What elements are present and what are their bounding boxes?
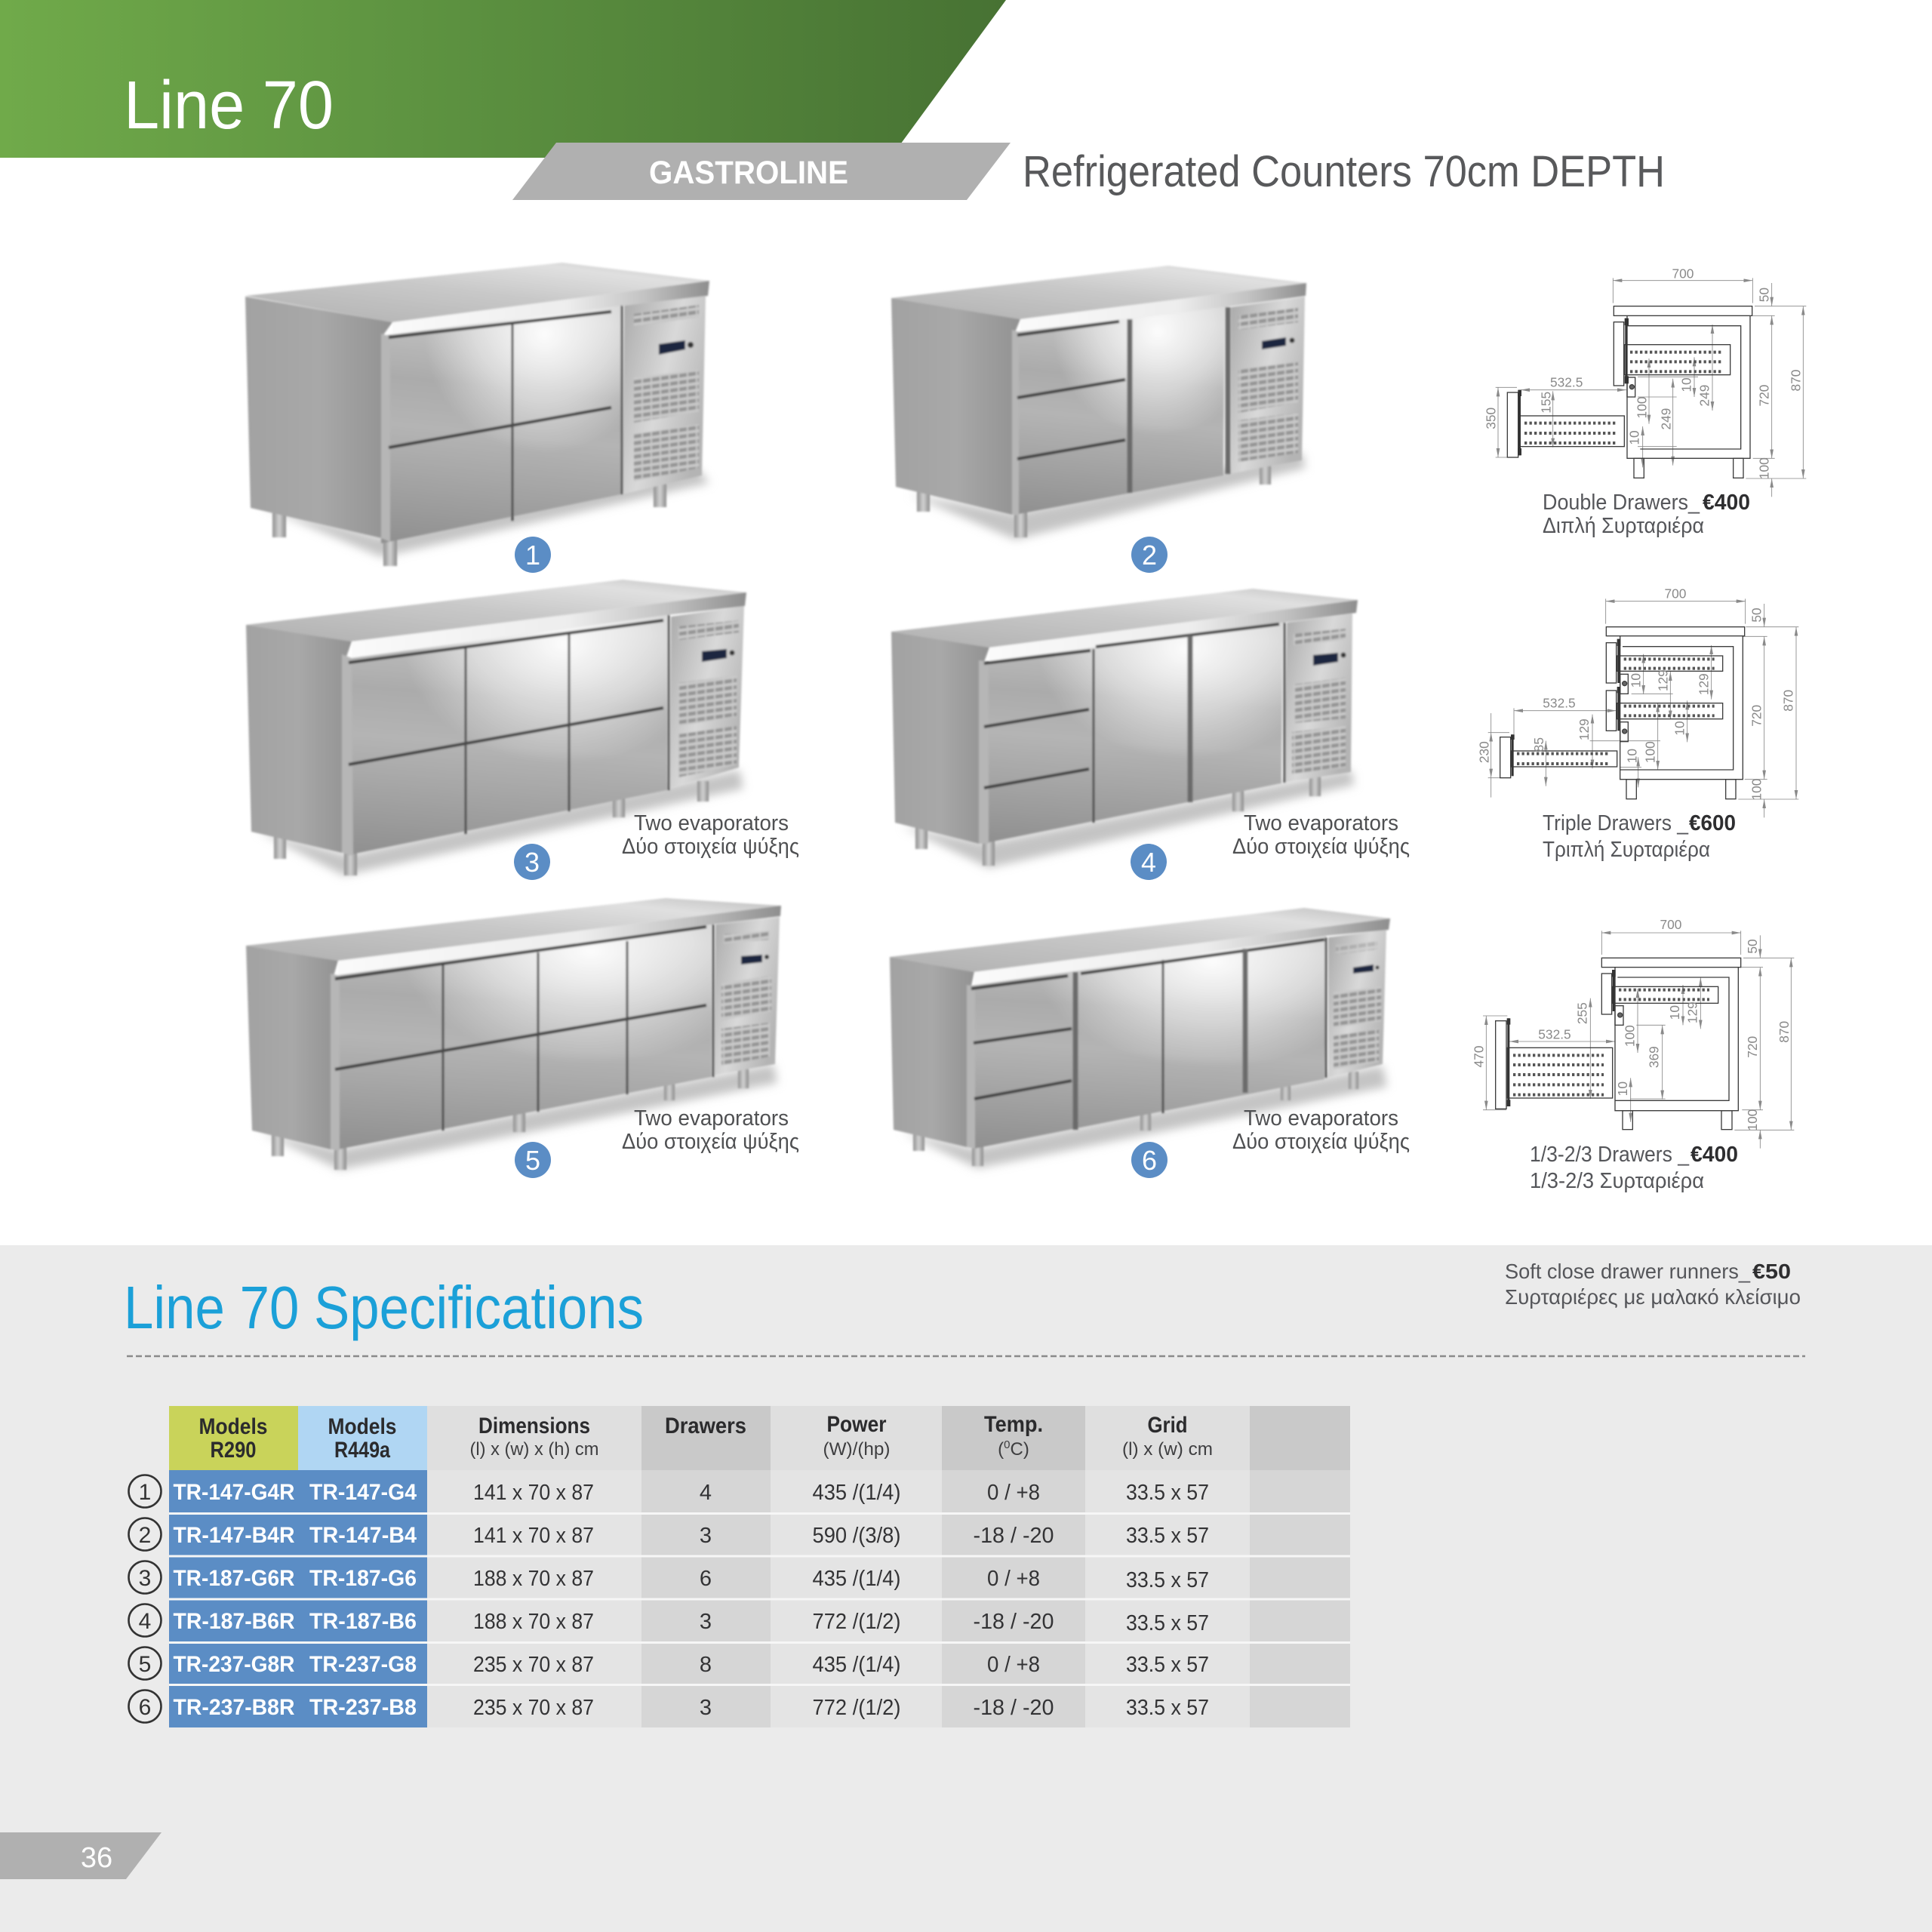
product 3: counter with six drawers [246, 580, 799, 880]
dimension values: 129 [1696, 673, 1711, 695]
row 1 [128, 1475, 1209, 1508]
number badge 2 [1131, 537, 1168, 573]
row 6: 6 [139, 1695, 151, 1720]
note: two evaporators: Two evaporators [634, 1106, 789, 1131]
dimension values: 255 [1575, 1002, 1590, 1024]
product 1: counter with four drawers [245, 263, 709, 573]
dimension values: 50 [1745, 939, 1760, 954]
dimension values: 10 [1679, 377, 1694, 392]
dimension values: 870 [1777, 1021, 1792, 1043]
row 6: TR-237-B8R [174, 1695, 295, 1720]
row 1: TR-147-G4 [309, 1480, 417, 1505]
dimension values: 230 [1476, 741, 1491, 763]
row 4: 4 [139, 1609, 151, 1634]
subtitle: Refrigerated Counters 70cm DEPTH [1023, 147, 1665, 196]
number badge 5 [515, 1142, 551, 1178]
row 5: 8 [700, 1653, 712, 1677]
row 2: 590 /(3/8) [812, 1524, 901, 1548]
row 6: -18 / -20 [974, 1696, 1054, 1720]
table header row [199, 1412, 1213, 1463]
row 6 [128, 1690, 1209, 1722]
note: two evaporators: Δύο στοιχεία ψύξης [622, 1130, 799, 1154]
dimension values: 700 [1672, 266, 1694, 281]
caption: one third and two thirds drawers price: 1/3-2/3 Drawers _ [1530, 1143, 1690, 1167]
row 3: 3 [139, 1566, 151, 1591]
dimension values: 10 [1624, 749, 1639, 763]
green header band [0, 0, 1006, 158]
row 4 [128, 1604, 1209, 1636]
dimension lines [1488, 598, 1798, 817]
row 4: 188 x 70 x 87 [473, 1610, 594, 1634]
row 5: 33.5 x 57 [1126, 1653, 1209, 1677]
number badge 2: 2 [1142, 540, 1157, 571]
table header row: Temp. [984, 1412, 1043, 1437]
row 3: 0 / +8 [987, 1567, 1040, 1591]
caption: double drawers price [1543, 491, 1750, 538]
row 3: 188 x 70 x 87 [473, 1567, 594, 1591]
table header row: Models [199, 1414, 267, 1439]
dimension values: 10 [1628, 673, 1643, 688]
dimension values: 700 [1665, 586, 1686, 601]
note: two evaporators [1232, 1106, 1410, 1154]
table header row: R290 [210, 1438, 257, 1463]
table header row: (l) x (w) cm [1122, 1439, 1213, 1460]
table header row: Dimensions [478, 1414, 590, 1438]
note: soft close runners: €50 [1752, 1260, 1791, 1283]
heading: specifications: Line 70 Specifications [124, 1274, 644, 1341]
row 1: 1 [139, 1480, 151, 1505]
row 1: 0 / +8 [987, 1481, 1040, 1505]
row 3: 6 [700, 1567, 712, 1591]
row 4: 772 /(1/2) [812, 1610, 901, 1634]
dimension values: 700 [1660, 917, 1681, 932]
number badge 1 [515, 537, 551, 573]
note: soft close runners: Soft close drawer runners_ [1505, 1260, 1750, 1283]
table header row: (W)/(hp) [823, 1439, 891, 1460]
row 4: 33.5 x 57 [1126, 1611, 1209, 1635]
dimension values: 129 [1684, 1001, 1700, 1023]
row 1: TR-147-G4R [174, 1480, 295, 1505]
dimension values: 100 [1745, 1109, 1760, 1131]
cabinet section [1507, 306, 1752, 478]
dimension values: 532.5 [1543, 695, 1576, 710]
perforations [1513, 990, 1709, 1095]
dimension values: 10 [1615, 1081, 1630, 1096]
dimension values: 720 [1756, 385, 1771, 406]
table header row: C) [1011, 1439, 1029, 1460]
caption: double drawers price: €400 [1703, 491, 1750, 515]
row 4: -18 / -20 [974, 1610, 1054, 1634]
dimension values: 369 [1646, 1046, 1661, 1068]
row 4: TR-187-B6R [174, 1609, 295, 1634]
product 6: three drawers and three doors [890, 908, 1410, 1178]
dimension values: 155 [1538, 392, 1553, 414]
row 5: 235 x 70 x 87 [473, 1653, 594, 1677]
row 2: -18 / -20 [974, 1524, 1054, 1548]
technical drawing: triple drawers [1476, 586, 1798, 817]
row 1: 33.5 x 57 [1126, 1481, 1209, 1505]
dimension values: 85 [1531, 737, 1546, 752]
dimension values [1484, 266, 1804, 479]
row 2: 33.5 x 57 [1126, 1524, 1209, 1548]
number badge 5: 5 [525, 1145, 540, 1176]
dimension values: 249 [1658, 408, 1673, 429]
row 5: 5 [139, 1652, 151, 1677]
row 2: TR-147-B4R [174, 1523, 295, 1548]
note: two evaporators [622, 811, 799, 859]
product 5: counter with eight drawers [246, 898, 799, 1178]
row 5 [128, 1647, 1209, 1680]
row 4: TR-187-B6 [309, 1609, 417, 1634]
number badge 1: 1 [525, 540, 540, 571]
dimension values: 350 [1484, 408, 1499, 429]
dimension values: 100 [1635, 397, 1650, 418]
caption: triple drawers price: €600 [1689, 811, 1736, 835]
product 2: three drawers and door [891, 266, 1306, 573]
note: two evaporators: Two evaporators [1244, 811, 1398, 835]
caption: triple drawers price: Triple Drawers _ [1543, 811, 1689, 835]
table header row: Drawers [665, 1414, 746, 1438]
table header row: Grid [1147, 1413, 1188, 1438]
dimension values: 10 [1627, 430, 1642, 445]
dimension values: 129 [1577, 718, 1592, 740]
dimension values: 100 [1643, 741, 1658, 763]
note: two evaporators: Δύο στοιχεία ψύξης [1232, 1130, 1410, 1154]
caption: one third and two thirds drawers price: 1/3-2/3 Συρταριέρα [1530, 1169, 1704, 1193]
note: two evaporators: Two evaporators [1244, 1106, 1398, 1131]
dimension lines [1496, 278, 1806, 497]
row 3: TR-187-G6 [309, 1566, 417, 1591]
dimension lines [1483, 931, 1794, 1149]
dimension values: 50 [1749, 608, 1764, 623]
note: two evaporators [622, 1106, 799, 1154]
table header row: 0 [1004, 1438, 1011, 1451]
dimension values: 532.5 [1538, 1027, 1571, 1042]
row 6: 235 x 70 x 87 [473, 1696, 594, 1720]
dimension values: 249 [1697, 385, 1712, 406]
dimension values: 100 [1756, 457, 1771, 479]
technical drawing: one third and two thirds drawers [1472, 917, 1794, 1149]
table header row: ( [998, 1439, 1004, 1460]
caption: triple drawers price [1543, 811, 1736, 862]
caption: one third and two thirds drawers price: €400 [1690, 1143, 1738, 1167]
row 2: 3 [700, 1524, 712, 1548]
row 1: 4 [700, 1481, 712, 1505]
number badge 4: 4 [1141, 847, 1156, 878]
row 2 [128, 1518, 1209, 1550]
dimension values: 470 [1472, 1046, 1487, 1067]
number badge 3: 3 [525, 847, 540, 878]
note: two evaporators: Δύο στοιχεία ψύξης [1232, 835, 1410, 859]
note: soft close runners: Συρταριέρες με μαλακό κλείσιμο [1505, 1285, 1801, 1309]
row 3: 33.5 x 57 [1126, 1568, 1209, 1592]
table header row: Models [328, 1414, 397, 1439]
row 1: 435 /(1/4) [812, 1481, 901, 1505]
dimension values: 870 [1781, 690, 1796, 712]
row 3: TR-187-G6R [174, 1566, 295, 1591]
table column backgrounds [169, 1406, 1350, 1727]
grey brand tag: GASTROLINE [649, 155, 848, 191]
caption: one third and two thirds drawers price [1530, 1143, 1738, 1193]
dimension values: 870 [1789, 370, 1804, 391]
row 6: 772 /(1/2) [812, 1696, 901, 1720]
row 4: 3 [700, 1610, 712, 1634]
note: two evaporators: Δύο στοιχεία ψύξης [622, 835, 799, 859]
specifications table [128, 1406, 1350, 1727]
row 1: 141 x 70 x 87 [473, 1481, 594, 1505]
page number tag [0, 1832, 162, 1879]
perforations [1517, 659, 1715, 764]
row 2: 141 x 70 x 87 [473, 1524, 594, 1548]
note: two evaporators: Two evaporators [634, 811, 789, 835]
row 5: TR-237-G8R [174, 1652, 295, 1677]
note: two evaporators [1232, 811, 1410, 859]
technical drawing: double drawers [1484, 266, 1806, 497]
dimension values: 720 [1745, 1036, 1760, 1058]
dimension values: 50 [1756, 288, 1771, 302]
dimension values: 532.5 [1550, 375, 1583, 390]
dimension values: 129 [1655, 669, 1670, 691]
cabinet section [1496, 958, 1741, 1130]
row 2: TR-147-B4 [309, 1523, 417, 1548]
grey brand tag [512, 143, 1011, 200]
dimension values [1476, 586, 1796, 800]
table header row: Power [827, 1412, 887, 1437]
row 5: 0 / +8 [987, 1653, 1040, 1677]
row 3 [128, 1561, 1209, 1594]
dimension values: 720 [1749, 705, 1764, 727]
caption: triple drawers price: Τριπλή Συρταριέρα [1543, 838, 1710, 862]
table header row: R449a [334, 1438, 390, 1463]
row 6: 3 [700, 1696, 712, 1720]
note: soft close runners [1505, 1260, 1801, 1309]
dimension values: 100 [1623, 1025, 1638, 1047]
product 4: three drawers and two doors [891, 589, 1410, 880]
number badge 6 [1131, 1142, 1168, 1178]
dimension values: 100 [1749, 779, 1764, 800]
row 5: TR-237-G8 [309, 1652, 417, 1677]
dimension values [1472, 917, 1792, 1131]
number badge 6: 6 [1142, 1145, 1157, 1176]
row 2: 2 [139, 1523, 151, 1548]
caption: double drawers price: Διπλή Συρταριέρα [1543, 514, 1704, 538]
caption: double drawers price: Double Drawers_ [1543, 491, 1700, 515]
row 5: 435 /(1/4) [812, 1653, 901, 1677]
title: Line 70 [124, 68, 334, 143]
dimension values: 10 [1672, 721, 1687, 736]
page number tag: 36 [81, 1842, 112, 1874]
number badge 3 [514, 844, 550, 880]
cabinet section [1500, 627, 1745, 799]
row 3: 435 /(1/4) [812, 1567, 901, 1591]
dimension values: 10 [1667, 1005, 1682, 1020]
row 6: 33.5 x 57 [1126, 1696, 1209, 1720]
row 6: TR-237-B8 [309, 1695, 417, 1720]
table header row: (l) x (w) x (h) cm [469, 1439, 599, 1460]
perforations [1524, 352, 1722, 443]
number badge 4 [1131, 844, 1167, 880]
panel: specifications background [0, 1245, 1932, 1932]
